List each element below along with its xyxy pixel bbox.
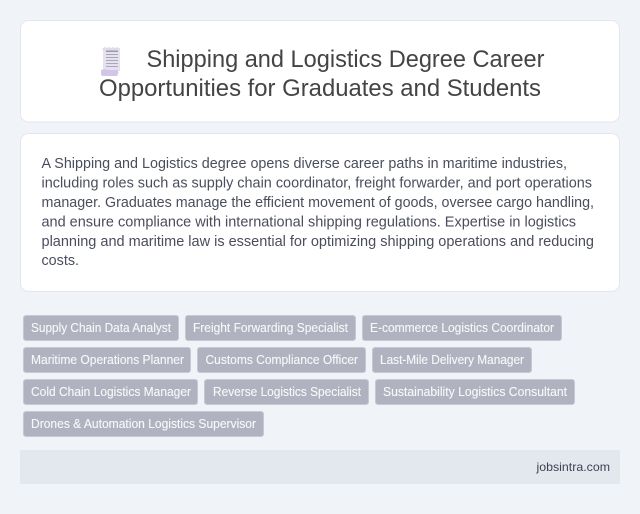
text block: description: planning and maritime law is essential for optimizing shipping operations and reducing: [42, 234, 594, 250]
tag: Supply Chain Data Analyst: [31, 321, 171, 335]
tag: [198, 348, 366, 372]
tag: [24, 348, 190, 372]
panel: description: [20, 134, 620, 292]
tag: Cold Chain Logistics Manager: [31, 385, 191, 399]
title: [99, 46, 544, 102]
text block: description: manager. Graduates manage the efficient movement of goods, oversee cargo handling,: [42, 195, 594, 211]
tag: [372, 348, 532, 372]
footer bar: [20, 450, 620, 484]
tag: [362, 316, 562, 340]
tag: [24, 412, 264, 436]
tag: Sustainability Logistics Consultant: [383, 385, 567, 399]
text block: description: including roles such as supply chain coordinator, freight forwarder, and port operations: [42, 176, 592, 192]
title: Shipping and Logistics Degree Career: [146, 46, 544, 73]
tag: [376, 380, 574, 404]
tag: [24, 316, 178, 340]
tag: Maritime Operations Planner: [31, 353, 184, 367]
icon: receipt scroll: [101, 47, 120, 76]
tag: [204, 380, 368, 404]
tag: [186, 316, 356, 340]
tag: [24, 380, 198, 404]
tag: Last-Mile Delivery Manager: [380, 353, 524, 367]
footer source: jobsintra.com: [535, 460, 610, 474]
tag list: career roles: [24, 316, 574, 436]
text block: description: [42, 156, 594, 269]
tag: Freight Forwarding Specialist: [193, 321, 348, 335]
tag: Drones & Automation Logistics Supervisor: [31, 417, 256, 431]
text block: description: costs.: [42, 253, 79, 269]
tag: Reverse Logistics Specialist: [213, 385, 361, 399]
text block: description: A Shipping and Logistics degree opens diverse career paths in maritime industries,: [42, 156, 567, 172]
tag: Customs Compliance Officer: [206, 353, 358, 367]
tag: E-commerce Logistics Coordinator: [370, 321, 554, 335]
text block: description: and ensure compliance with international shipping regulations. Expertise in logistics: [42, 214, 576, 230]
panel: title header: [20, 20, 620, 122]
title: Opportunities for Graduates and Students: [99, 75, 541, 102]
